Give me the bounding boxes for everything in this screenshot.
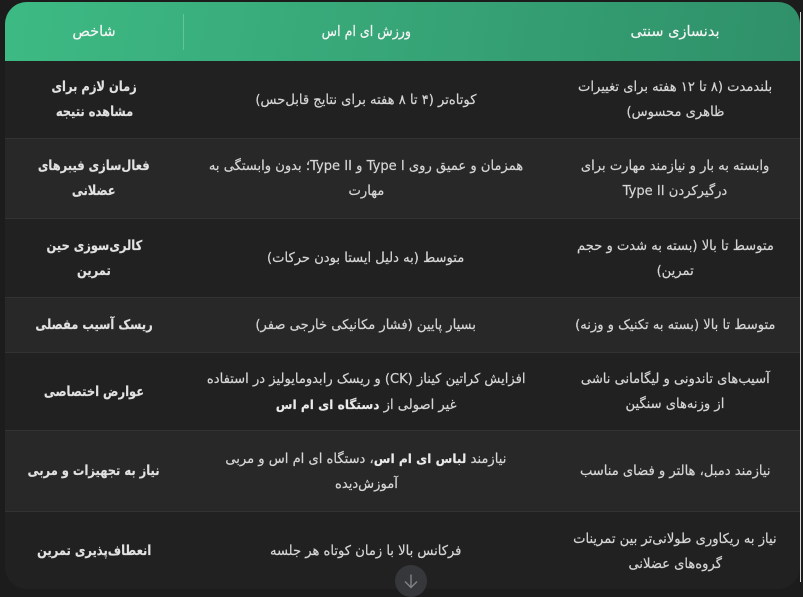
traditional value: آسیب‌های تاندونی و لیگامانی ناشی [581, 371, 769, 387]
indicator label: انعطاف‌پذیری تمرین [37, 543, 151, 559]
traditional value: درگیرکردن Type II [623, 183, 727, 199]
traditional value: تمرین) [656, 262, 694, 278]
indicator label: عوارض اختصاصی [44, 384, 144, 400]
EMS value: افزایش کراتین کیناز (CK) و ریسک رابدومایولیز در استفاده [207, 370, 525, 386]
EMS value: بسیار پایین (فشار مکانیکی خارجی صفر) [256, 317, 476, 333]
heading: EMS training: ورزش ای ام اس [321, 24, 411, 40]
traditional value: نیازمند دمبل، هالتر و فضای مناسب [580, 463, 770, 479]
EMS value: همزمان و عمیق روی Type I و Type II؛ بدون وابستگی به [209, 158, 523, 174]
EMS value [226, 450, 506, 492]
icon: scroll down arrow button [395, 565, 427, 597]
indicator label: فعال‌سازی فیبرهای [38, 158, 150, 174]
traditional value [577, 238, 773, 278]
EMS value [207, 370, 525, 413]
row: joint injury risk [5, 298, 800, 353]
row: training flexibility [5, 512, 800, 590]
row: muscle fibre activation [5, 139, 800, 219]
traditional value [581, 158, 769, 199]
heading: indicator: شاخص [72, 24, 116, 40]
traditional value [573, 530, 777, 572]
EMS value: غیر اصولی از دستگاه ای ام اس [276, 396, 456, 412]
traditional value: متوسط تا بالا (بسته به تکنیک و وزنه) [575, 317, 775, 333]
traditional value: بلندمدت (۸ تا ۱۲ هفته برای تغییرات [578, 79, 772, 95]
row: time to results [5, 61, 800, 139]
row: equipment and coach [5, 431, 800, 512]
indicator label: زمان لازم برای [51, 79, 137, 95]
indicator label: ریسک آسیب مفصلی [35, 317, 153, 333]
EMS value [209, 158, 523, 199]
indicator label [46, 238, 142, 278]
EMS value: کوتاه‌تر (۴ تا ۸ هفته برای نتایج قابل‌حس) [255, 92, 477, 108]
indicator label [51, 79, 137, 120]
indicator label: مشاهده نتیجه [55, 104, 133, 120]
EMS value: مهارت [348, 183, 384, 199]
traditional value: متوسط تا بالا (بسته به شدت و حجم [577, 238, 773, 254]
traditional value: گروه‌های عضلانی [628, 556, 722, 572]
EMS value: نیازمند لباس ای ام اس، دستگاه ای ام اس و مربی [226, 451, 506, 467]
traditional value [578, 79, 772, 120]
traditional value: نیاز به ریکاوری طولانی‌تر بین تمرینات [573, 530, 777, 546]
indicator label: عضلانی [72, 183, 116, 199]
EMS value: فرکانس بالا با زمان کوتاه هر جلسه [270, 543, 462, 559]
indicator label: تمرین [77, 262, 111, 278]
EMS value: متوسط (به دلیل ایستا بودن حرکات) [267, 250, 465, 266]
EMS value: آموزش‌دیده [335, 476, 397, 492]
traditional value: از وزنه‌های سنگین [626, 396, 724, 412]
table header [5, 2, 800, 61]
indicator label [38, 158, 150, 199]
heading: traditional bodybuilding: بدنسازی سنتی [630, 24, 719, 40]
traditional value: ظاهری محسوس) [626, 104, 724, 120]
traditional value: وابسته به بار و نیازمند مهارت برای [581, 158, 769, 174]
indicator label: کالری‌سوزی حین [46, 238, 142, 254]
row: calorie burn [5, 219, 800, 298]
indicator label: نیاز به تجهیزات و مربی [28, 463, 160, 479]
row: specific side effects [5, 353, 800, 431]
traditional value [581, 370, 770, 412]
